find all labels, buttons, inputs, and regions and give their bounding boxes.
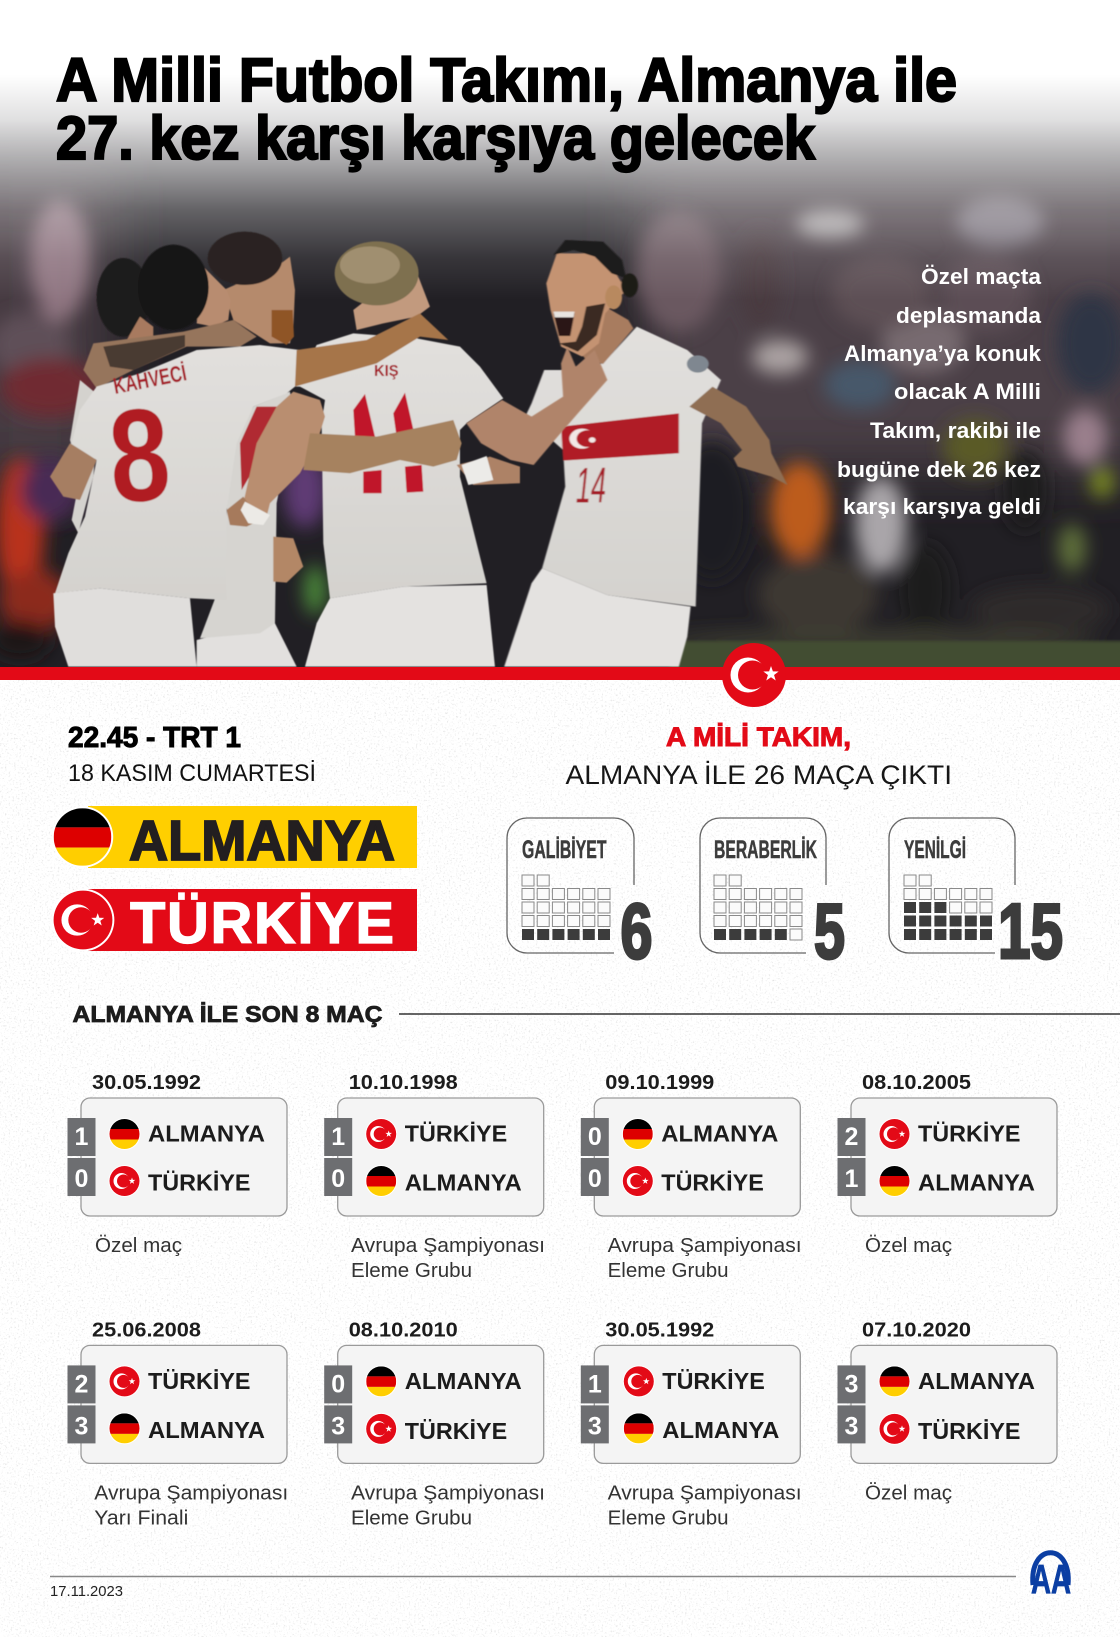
section heading: last 8 matches: ALMANYA İLE SON 8 MAÇ [72, 1001, 383, 1027]
match card: 30.05.1992 Almanya 1-0 Türkiye: 1 [75, 1123, 89, 1151]
stat card: galibiyet 6 [507, 818, 652, 975]
match card: 08.10.2005 Türkiye 2-1 Almanya: 08.10.2005 [862, 1072, 971, 1094]
stat card: yenilgi 15 [889, 818, 1063, 975]
banner: Türkiye [52, 889, 417, 956]
match card: 25.06.2008 Türkiye 2-3 Almanya: 25.06.2008 [92, 1319, 201, 1341]
match card: 08.10.2005 Türkiye 2-1 Almanya [838, 1072, 1057, 1257]
match card: 30.05.1992 Türkiye 1-3 Almanya [581, 1319, 802, 1529]
white top fade [0, 0, 1120, 300]
shirt name KAHVECİ: KAHVECİ [111, 359, 189, 399]
match time and channel: 18 KASIM CUMARTESİ [68, 760, 316, 787]
match card: 30.05.1992 Türkiye 1-3 Almanya: Avrupa Şampiyonası [608, 1482, 802, 1504]
record heading: ALMANYA İLE 26 MAÇA ÇIKTI [566, 759, 952, 790]
match card: 07.10.2020 Almanya 3-3 Türkiye: TÜRKİYE [918, 1418, 1020, 1444]
match card: 30.05.1992 Türkiye 1-3 Almanya: 3 [588, 1412, 602, 1440]
match card: 30.05.1992 Almanya 1-0 Türkiye [68, 1072, 287, 1257]
waffle chart: 15 of 26 [904, 875, 992, 940]
match card: 08.10.2010 Almanya 0-3 Türkiye: TÜRKİYE [405, 1418, 507, 1444]
record heading: A MİLİ TAKIM, [666, 722, 851, 752]
intro text over photo: Takım, rakibi ile [870, 418, 1041, 443]
shirt number 8: 8 [104, 380, 174, 531]
match card: 25.06.2008 Türkiye 2-3 Almanya: TÜRKİYE [148, 1368, 250, 1394]
match card: 10.10.1998 Türkiye 1-0 Almanya: ALMANYA [405, 1170, 522, 1196]
match card: 08.10.2010 Almanya 0-3 Türkiye: 3 [331, 1412, 345, 1440]
match card: 30.05.1992 Almanya 1-0 Türkiye: ALMANYA [148, 1120, 265, 1146]
match card: 10.10.1998 Türkiye 1-0 Almanya: 0 [331, 1165, 345, 1193]
red divider band [0, 667, 1120, 680]
match time and channel [68, 722, 316, 787]
match card: 30.05.1992 Almanya 1-0 Türkiye: Özel maç [95, 1235, 182, 1257]
match card: 07.10.2020 Almanya 3-3 Türkiye: Özel maç [865, 1482, 952, 1504]
match card: 08.10.2010 Almanya 0-3 Türkiye: Eleme Grubu [351, 1507, 472, 1529]
intro text over photo: deplasmanda [896, 303, 1042, 328]
intro text over photo [837, 264, 1042, 519]
banner: Türkiye: TÜRKİYE [130, 891, 394, 956]
stat card: yenilgi 15: 15 [998, 887, 1063, 975]
match card: 09.10.1999 Almanya 0-0 Türkiye: Avrupa Şampiyonası [608, 1235, 802, 1257]
match card: 08.10.2010 Almanya 0-3 Türkiye [324, 1319, 545, 1529]
match card: 30.05.1992 Türkiye 1-3 Almanya: TÜRKİYE [662, 1368, 765, 1394]
shirt name fragment: KIŞ [374, 363, 399, 380]
match card: 25.06.2008 Türkiye 2-3 Almanya [68, 1319, 288, 1529]
waffle chart: 6 of 26 [522, 875, 610, 940]
match card: 10.10.1998 Türkiye 1-0 Almanya: 1 [331, 1123, 345, 1151]
match card: 10.10.1998 Türkiye 1-0 Almanya: TÜRKİYE [405, 1120, 507, 1146]
icon: Anadolu Agency logo [1031, 1553, 1071, 1602]
stat card: beraberlik 5: BERABERLİK [714, 836, 817, 864]
stat card: galibiyet 6: GALİBİYET [522, 836, 606, 864]
match card: 09.10.1999 Almanya 0-0 Türkiye: 0 [588, 1123, 602, 1151]
title: A Milli Futbol Takımı, Almanya ile [56, 46, 957, 114]
match card: 09.10.1999 Almanya 0-0 Türkiye: 09.10.1999 [605, 1072, 714, 1094]
match card: 30.05.1992 Almanya 1-0 Türkiye: 30.05.1992 [92, 1072, 201, 1094]
match card: 08.10.2010 Almanya 0-3 Türkiye: 0 [331, 1370, 345, 1398]
player number 14: 14 [576, 458, 606, 514]
match card: 08.10.2010 Almanya 0-3 Türkiye: ALMANYA [405, 1368, 522, 1394]
match card: 30.05.1992 Türkiye 1-3 Almanya: ALMANYA [662, 1417, 779, 1443]
match card: 08.10.2010 Almanya 0-3 Türkiye: Avrupa Şampiyonası [351, 1482, 545, 1504]
match card: 07.10.2020 Almanya 3-3 Türkiye: 3 [845, 1370, 858, 1398]
match card: 07.10.2020 Almanya 3-3 Türkiye [838, 1319, 1057, 1504]
match card: 07.10.2020 Almanya 3-3 Türkiye: 3 [845, 1412, 858, 1440]
player number 14 [504, 240, 787, 667]
title: 27. kez karşı karşıya gelecek [56, 104, 815, 172]
banner: Almanya: ALMANYA [129, 809, 395, 873]
match card: 08.10.2005 Türkiye 2-1 Almanya: Özel maç [865, 1235, 952, 1257]
match card: 10.10.1998 Türkiye 1-0 Almanya: Avrupa Şampiyonası [351, 1235, 545, 1257]
icon: Anadolu Agency logo: AA [1031, 1556, 1071, 1602]
match card: 25.06.2008 Türkiye 2-3 Almanya: 2 [75, 1370, 88, 1398]
intro text over photo: bugüne dek 26 kez [837, 457, 1041, 482]
match card: 10.10.1998 Türkiye 1-0 Almanya: Eleme Grubu [351, 1260, 472, 1282]
footer: 17.11.2023 [50, 1583, 123, 1600]
stat card: beraberlik 5: 5 [814, 887, 845, 975]
match card: 07.10.2020 Almanya 3-3 Türkiye: 07.10.2020 [862, 1319, 971, 1341]
match card: 08.10.2010 Almanya 0-3 Türkiye: 08.10.2010 [349, 1319, 458, 1341]
match time and channel: 22.45 - TRT 1 [68, 722, 241, 754]
match card: 30.05.1992 Türkiye 1-3 Almanya: Eleme Grubu [608, 1507, 729, 1529]
match card: 09.10.1999 Almanya 0-0 Türkiye: Eleme Grubu [608, 1260, 729, 1282]
match card: 09.10.1999 Almanya 0-0 Türkiye: 0 [588, 1165, 602, 1193]
match card: 25.06.2008 Türkiye 2-3 Almanya: 3 [75, 1412, 88, 1440]
match card: 30.05.1992 Türkiye 1-3 Almanya: 30.05.1992 [605, 1319, 714, 1341]
stat card: galibiyet 6: 6 [620, 887, 652, 975]
match card: 30.05.1992 Almanya 1-0 Türkiye: TÜRKİYE [148, 1170, 250, 1196]
intro text over photo: olacak A Milli [894, 379, 1041, 404]
match card: 30.05.1992 Türkiye 1-3 Almanya: 1 [588, 1370, 602, 1398]
match card: 08.10.2005 Türkiye 2-1 Almanya: ALMANYA [918, 1170, 1035, 1196]
icon: Turkish flag medallion [722, 643, 786, 707]
match card: 25.06.2008 Türkiye 2-3 Almanya: Avrupa Şampiyonası [94, 1482, 288, 1504]
blurred stadium crowd [0, 0, 1120, 671]
match card: 10.10.1998 Türkiye 1-0 Almanya: 10.10.1998 [349, 1072, 458, 1094]
title [56, 46, 957, 172]
match card: 25.06.2008 Türkiye 2-3 Almanya: Yarı Finali [94, 1507, 188, 1529]
match card: 10.10.1998 Türkiye 1-0 Almanya [324, 1072, 545, 1282]
match card: 09.10.1999 Almanya 0-0 Türkiye [581, 1072, 802, 1282]
match card: 08.10.2005 Türkiye 2-1 Almanya: 1 [845, 1165, 859, 1193]
stat card: beraberlik 5 [700, 818, 845, 975]
intro text over photo: Almanya’ya konuk [844, 341, 1042, 366]
match card: 09.10.1999 Almanya 0-0 Türkiye: TÜRKİYE [661, 1170, 764, 1196]
match card: 07.10.2020 Almanya 3-3 Türkiye: ALMANYA [918, 1368, 1035, 1394]
match card: 08.10.2005 Türkiye 2-1 Almanya: 2 [845, 1123, 858, 1151]
photo: Turkish national team players celebrating [0, 0, 1120, 671]
match card: 30.05.1992 Almanya 1-0 Türkiye: 0 [75, 1165, 88, 1193]
match card: 25.06.2008 Türkiye 2-3 Almanya: ALMANYA [148, 1417, 265, 1443]
intro text over photo: karşı karşıya geldi [843, 494, 1041, 519]
raised arm of number 11 touching chest of number 14 [466, 347, 607, 465]
intro text over photo: Özel maçta [921, 264, 1042, 289]
huddle of three players from behind [50, 232, 520, 667]
match card: 08.10.2005 Türkiye 2-1 Almanya: TÜRKİYE [918, 1120, 1020, 1146]
waffle chart: 5 of 26 [714, 875, 802, 940]
stat card: yenilgi 15: YENİLGİ [904, 836, 966, 864]
match card: 09.10.1999 Almanya 0-0 Türkiye: ALMANYA [661, 1120, 778, 1146]
record heading [566, 722, 952, 790]
